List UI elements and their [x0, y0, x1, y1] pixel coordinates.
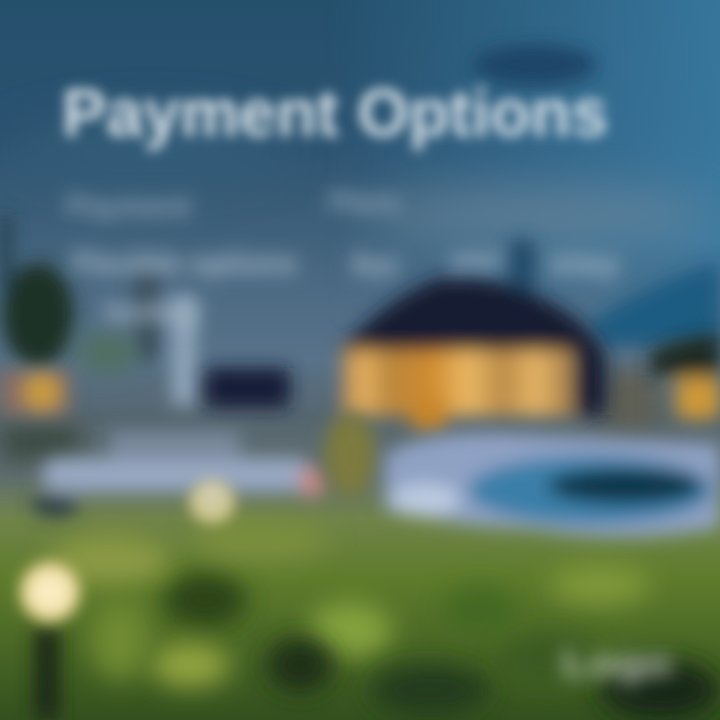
text block: options: your [450, 241, 502, 277]
house walls [342, 350, 572, 416]
shrub [324, 413, 376, 497]
right pool [385, 433, 720, 537]
left tree [0, 215, 196, 405]
dark building [205, 368, 290, 408]
distant mountain [590, 262, 720, 345]
text block: options: today [105, 293, 200, 329]
text block: options: Flexible options [72, 245, 297, 281]
text block: options: stay [548, 245, 620, 281]
title: Payment Options [62, 75, 608, 151]
house roof [335, 278, 606, 415]
house chimney [510, 240, 534, 300]
text block: intro [66, 186, 400, 223]
lamp post [34, 628, 60, 720]
text block: intro: Plans [328, 186, 400, 219]
glowing lamp [12, 554, 88, 630]
mid ground band [0, 335, 660, 460]
left building glow [0, 370, 70, 415]
right house [650, 335, 720, 419]
dark cloud [473, 45, 597, 85]
text block: options: for [352, 247, 400, 283]
house door glow [412, 398, 446, 430]
main house [335, 240, 606, 430]
small garden light [182, 474, 242, 530]
text block: options [72, 241, 620, 329]
lawn patches [50, 520, 720, 720]
text block: intro: Payment [66, 190, 191, 223]
left pool [31, 432, 325, 517]
footer label: Logo [562, 643, 672, 685]
